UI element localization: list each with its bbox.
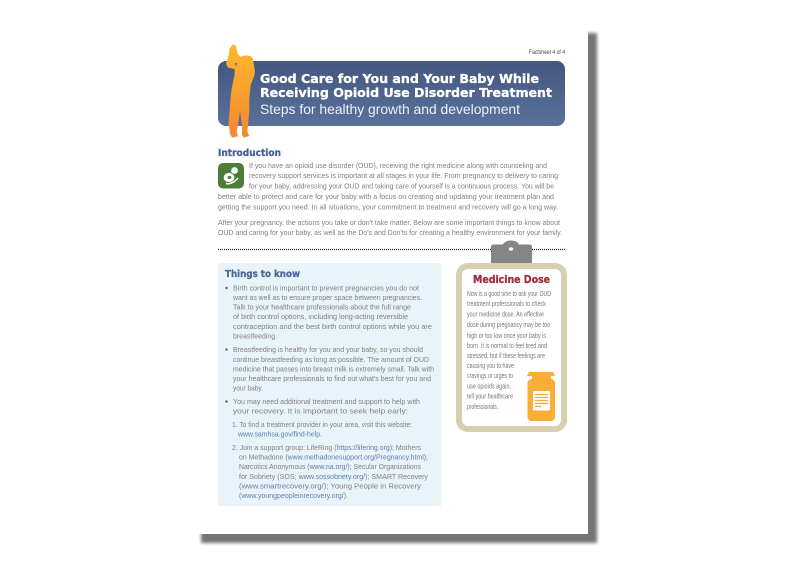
medicine dose text: born. It is normal to feel tired and	[467, 341, 547, 350]
icon: mother holding baby silhouette	[226, 44, 255, 138]
bullet: additional support	[225, 397, 420, 416]
bullet: birth control: want as well as to ensure proper space between pregnancies.	[232, 293, 422, 302]
banner title	[260, 71, 552, 100]
bullet: birth control: contraception and the best birth control options while you are	[233, 322, 432, 331]
heading: introduction: Introduction	[218, 148, 281, 159]
panel: medicine dose clipboard	[459, 240, 564, 429]
introduction text: OUD and caring for your baby, as well as the Do's and Don'ts for creating a healthy environment for your family.	[218, 228, 562, 237]
list item 1: find a provider: www.samhsa.gov/find-help.	[237, 430, 322, 438]
icon: medicine bottle	[527, 372, 555, 421]
bullet: breastfeeding: continue breastfeeding as long as possible. The amount of OUD	[233, 355, 429, 364]
introduction text: After your pregnancy, the actions you take or don't take matter. Below are some important things to know about	[218, 218, 560, 227]
list item 2: support groups: (www.youngpeopleinrecovery.org/).	[239, 491, 348, 500]
introduction text: better able to protect and care for your baby with a focus on creating and updating your treatment plan and	[218, 192, 554, 201]
bullet: breastfeeding: your baby.	[233, 384, 263, 392]
bullet: breastfeeding: your healthcare professionals to find out what's best for you and	[233, 374, 431, 383]
bullet: breastfeeding: medicine that passes into breast milk is extremely small. Talk with	[233, 364, 434, 374]
medicine dose text: treatment professionals to check	[467, 299, 546, 308]
icon: mother and baby badge	[218, 163, 244, 188]
introduction text: for your baby, addressing your OUD and taking care of yourself is a continuous process. You will be	[249, 182, 554, 190]
medicine dose text: causing you to have	[467, 361, 514, 370]
medicine dose text: your medicine dose. An effective	[467, 310, 544, 318]
heading: medicine dose: Medicine Dose	[473, 274, 550, 286]
page drop shadow	[201, 33, 597, 543]
icon: clipboard clip	[491, 240, 532, 263]
list item 1: find a provider	[232, 420, 412, 438]
list item 2: support groups: 2. Join a support group: LifeRing (https://lifering.org); Mothers	[232, 443, 421, 452]
list item 1: find a provider: 1. To find a treatment provider in your area, visit this website:	[232, 420, 412, 429]
heading: things to know: Things to know	[225, 269, 300, 280]
list item 2: support groups: Narcotics Anonymous (www.na.org/); Secular Organizations	[239, 462, 421, 471]
bullet: breastfeeding	[225, 345, 434, 392]
panel: things to know	[218, 263, 441, 506]
introduction text	[218, 161, 562, 237]
list item 2: support groups	[232, 443, 428, 500]
medicine dose text: Now is a good time to ask your OUD	[467, 289, 551, 298]
medicine dose text: tell your healthcare	[467, 392, 513, 400]
bullet: breastfeeding: Breastfeeding is healthy for you and your baby, so you should	[233, 345, 423, 354]
factsheet number: Factsheet 4 of 4	[529, 49, 565, 56]
banner title: Good Care for You and Your Baby While	[260, 71, 539, 86]
bullet: birth control: breastfeeding.	[233, 332, 277, 340]
bullet: birth control: of birth control options, including long-acting reversible	[233, 312, 408, 321]
medicine dose text: stressed, but if these feelings are	[467, 351, 545, 360]
introduction text: recovery support services is important at all stages in your life. From pregnancy to delivery to caring	[249, 171, 558, 180]
medicine dose text	[467, 289, 551, 411]
medicine dose text: professionals.	[467, 402, 498, 411]
medicine dose text: high or too low once your baby is	[467, 331, 546, 340]
introduction text: If you have an opioid use disorder (OUD), receiving the right medicine along with counseling and	[249, 161, 547, 170]
banner subtitle: Steps for healthy growth and development	[260, 101, 520, 117]
white sheet	[190, 20, 588, 534]
bullet: additional support: You may need additional treatment and support to help with	[233, 397, 420, 406]
medicine dose text: use opioids again,	[467, 382, 511, 390]
bullet: birth control: Birth control is important to prevent pregnancies you do not	[233, 284, 419, 292]
bullet: additional support: your recovery. It is important to seek help early:	[233, 406, 408, 416]
bullet: birth control: Talk to your healthcare professionals about the full range	[233, 302, 411, 312]
list item 2: support groups: (www.smartrecovery.org/ ); Young People in Recovery	[239, 482, 421, 490]
banner title: Receiving Opioid Use Disorder Treatment	[260, 85, 552, 100]
medicine dose text: cravings or urges to	[467, 371, 513, 380]
medicine dose text: dose during pregnancy may be too	[467, 320, 550, 329]
list item 2: support groups: for Sobriety (SOS; www.sossobriety.org/); SMART Recovery	[239, 472, 428, 481]
header banner	[218, 61, 565, 126]
bullet: birth control	[225, 284, 432, 340]
list item 2: support groups: on Methadone (www.methadonesupport.org/Pregnancy.html);	[239, 452, 428, 462]
introduction text: getting the support you need. In all situations, your commitment to treatment and recovery will go a long way.	[218, 202, 558, 212]
